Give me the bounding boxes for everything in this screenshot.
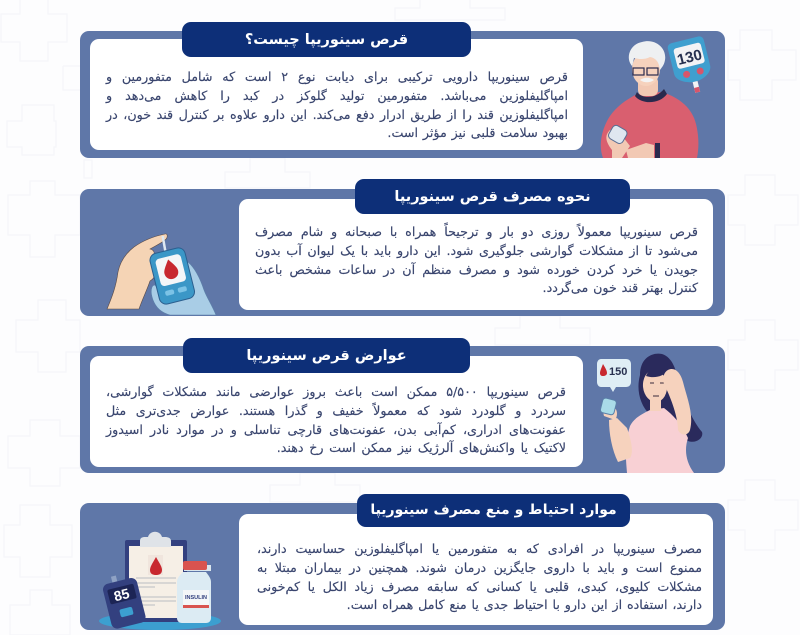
text card: precautions bbox=[239, 514, 713, 625]
illustration: woman with headache and meter: 150 bbox=[609, 366, 627, 378]
panel: side effects bbox=[80, 346, 725, 473]
heading: how to take: نحوه مصرف قرص سینوریپا bbox=[394, 189, 591, 205]
body text: precautions: ممنوع است و باید با داروی جایگزین درمان شوند. همچنین در بیماران مبتلا به bbox=[257, 560, 702, 575]
heading: how to take bbox=[355, 179, 630, 214]
illustration: clipboard, meter and insulin vial: 85 bbox=[112, 585, 131, 604]
body text: what is Sinoripa: بهبود سلامت قلبی نیز مؤثر است. bbox=[387, 125, 568, 140]
illustration: finger-prick glucose test bbox=[106, 234, 216, 315]
text card: how to take bbox=[239, 199, 713, 310]
heading: side effects bbox=[183, 338, 470, 373]
illustration: elderly man with glucose meter: 130 bbox=[675, 46, 704, 69]
text card: side effects bbox=[90, 356, 583, 467]
body text: how to take bbox=[255, 222, 698, 296]
body text: precautions: دارند، استفاده از این دارو با احتیاط جدی یا منع کامل همراه است. bbox=[347, 597, 702, 612]
body text: what is Sinoripa bbox=[105, 69, 568, 140]
body text: side effects bbox=[105, 384, 566, 456]
heading: precautions bbox=[357, 494, 630, 527]
body text: how to take: می‌شود تا از مشکلات گوارشی جلوگیری شود. این دارو باید با یک لیوان آب بدون bbox=[255, 243, 698, 258]
heading: precautions: موارد احتیاط و منع مصرف سینوریپا bbox=[370, 502, 617, 518]
body text: side effects: سردرد و گلودرد شود که معمولاً خفیف و گذرا هستند. عوارض جدی‌تری مثل bbox=[106, 403, 566, 418]
panel: precautions bbox=[80, 503, 725, 630]
illustration: clipboard, meter and insulin vial: INSULIN bbox=[185, 595, 207, 601]
body text: side effects: قرص سینوریپا ۵/۵۰۰ ممکن است باعث بروز عوارضی مانند مشکلات گوارشی، bbox=[106, 384, 566, 399]
text card: what is Sinoripa bbox=[90, 39, 583, 150]
illustration: elderly man with glucose meter bbox=[600, 36, 710, 158]
body text: what is Sinoripa: امپاگلیفلوزین قند را از طریق ادرار دفع می‌کند. این دارو علاوه بر کنترل قند خون، در bbox=[106, 107, 568, 122]
body text: how to take: قرص سینوریپا معمولاً روزی دو بار و ترجیحاً همراه با صبحانه و شام مصرف bbox=[255, 224, 698, 239]
body text: precautions bbox=[257, 541, 702, 612]
body text: precautions: مشکلات کلیوی، کبدی، قلبی یا کسانی که سابقه مصرف زیاد الکل یا کم‌خونی bbox=[257, 579, 702, 594]
body text: what is Sinoripa: قرص سینوریپا دارویی ترکیبی برای دیابت نوع ۲ است که شامل متفورمین و bbox=[106, 69, 568, 84]
body text: how to take: جویدن یا خرد کردن خورده شود و مصرف منظم آن در ساعات مشخص باعث bbox=[255, 262, 698, 277]
body text: precautions: مصرف سینوریپا در افرادی که به متفورمین یا امپاگلیفلوزین حساسیت دارند، bbox=[257, 541, 702, 556]
panel: what is Sinoripa bbox=[80, 31, 725, 158]
body text: what is Sinoripa: امپاگلیفلوزین می‌باشد. متفورمین تولید گلوکز در کبد را کاهش می‌دهد و bbox=[106, 88, 568, 103]
heading: what is Sinoripa bbox=[182, 22, 471, 57]
body text: side effects: لاکتیک یا واکنش‌های آلرژیک نیز ممکن است رخ دهند. bbox=[277, 440, 566, 455]
heading: side effects: عوارض قرص سینوریپا bbox=[246, 348, 407, 364]
illustration: clipboard, meter and insulin vial bbox=[99, 532, 221, 630]
heading: what is Sinoripa: قرص سینوریپا چیست؟ bbox=[245, 32, 408, 48]
panel: how to take bbox=[80, 189, 725, 316]
body text: how to take: کنترل بهتر قند خون می‌گردد. bbox=[543, 280, 698, 295]
body text: side effects: عفونت‌های ادراری، کم‌آبی بدن، عفونت‌های قارچی تناسلی و در موارد نادر اسیدوز bbox=[106, 422, 566, 437]
illustration: woman with headache and meter bbox=[597, 354, 702, 473]
